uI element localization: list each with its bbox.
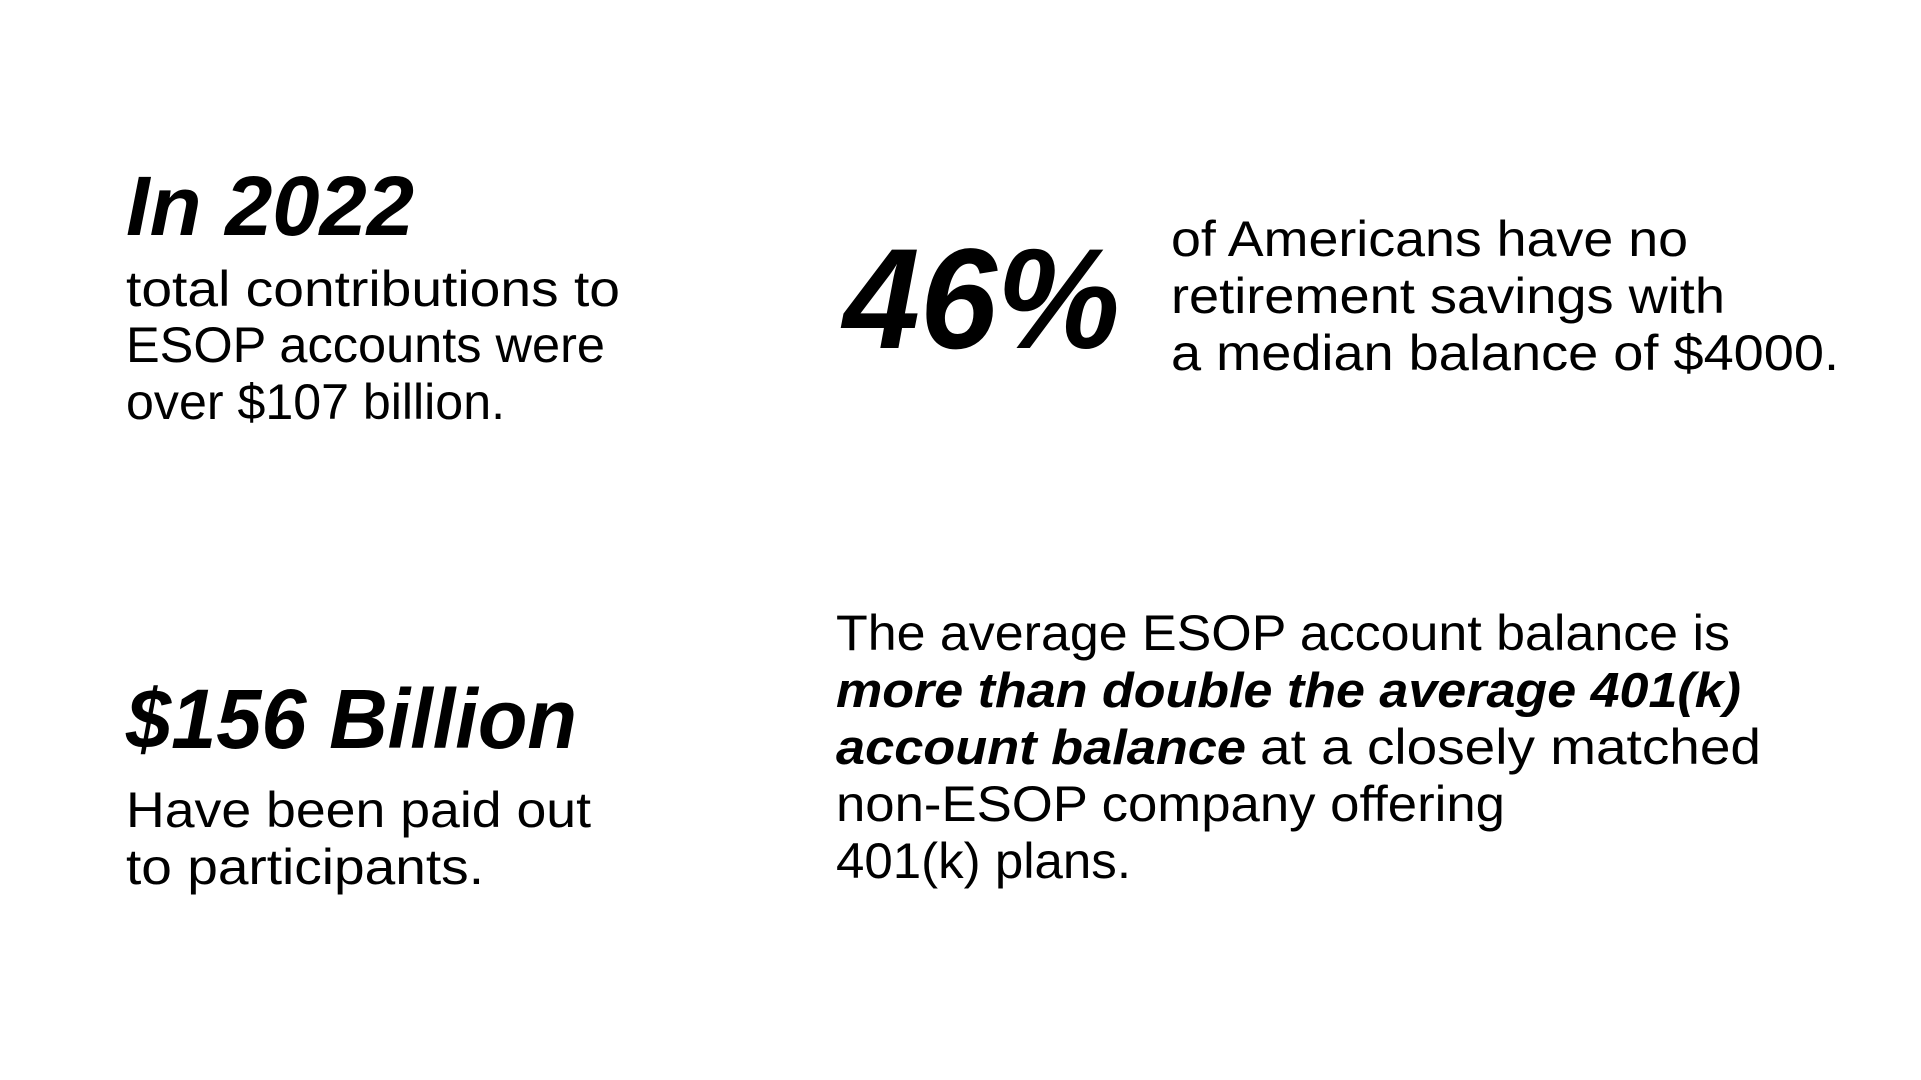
text block: contributions description: over $107 billion. (126, 374, 505, 430)
panel: average account balance comparison: account balance (836, 721, 1246, 775)
panel: 156 billion paid out (125, 672, 591, 895)
text block: retirement savings description: of Americans have no (1171, 211, 1688, 267)
heading: In 2022: In 2022 (126, 159, 414, 253)
text block: paid out description: to participants. (126, 839, 484, 895)
panel: average account balance comparison: at a closely matched (1260, 719, 1761, 775)
panel: average account balance comparison: The average ESOP account balance is (836, 605, 1730, 661)
panel: 2022 contributions (126, 159, 620, 430)
text block: contributions description (126, 261, 620, 430)
panel: 46 percent statistic (840, 211, 1839, 381)
text block: contributions description: total contributions to (126, 261, 620, 317)
panel: average account balance comparison: non-ESOP company offering (836, 776, 1505, 832)
text block: paid out description: Have been paid out (126, 782, 591, 838)
panel: average account balance comparison (836, 605, 1761, 889)
text block: retirement savings description (1171, 211, 1839, 381)
text block: retirement savings description: a median balance of $4000. (1171, 325, 1839, 381)
heading: $156 Billion: $156 Billion (125, 672, 577, 766)
text block: retirement savings description: retirement savings with (1171, 268, 1725, 324)
big number: 46%: 46% (840, 220, 1120, 379)
panel: average account balance comparison: 401(k) plans. (836, 833, 1131, 889)
text block: contributions description: ESOP accounts were (126, 317, 605, 373)
panel: average account balance comparison: more than double the average 401(k) (836, 664, 1741, 718)
text block: paid out description (126, 782, 591, 895)
